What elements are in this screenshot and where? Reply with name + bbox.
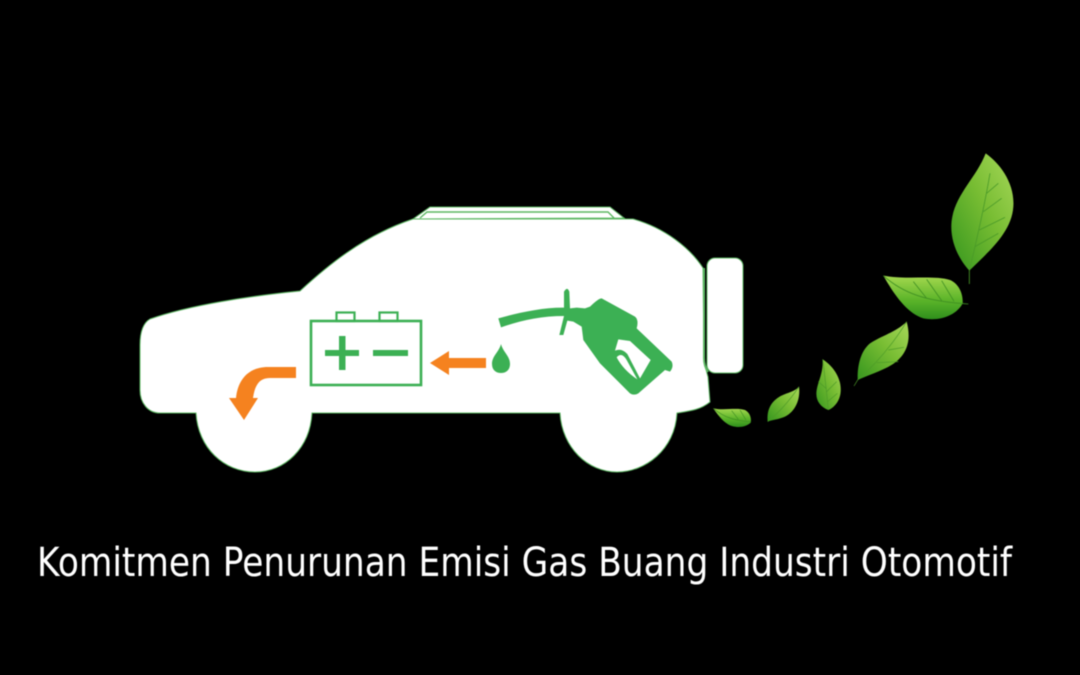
leaf: fifth xyxy=(768,387,799,422)
arrow: battery to wheel xyxy=(229,367,296,420)
minus sign xyxy=(373,350,408,356)
roof rack xyxy=(413,207,624,219)
spare wheel xyxy=(707,258,743,373)
leaf: sixth xyxy=(713,408,751,427)
nozzle handle opening xyxy=(615,339,651,378)
car silhouette xyxy=(140,207,743,472)
icon: battery xyxy=(311,312,421,385)
car body xyxy=(140,219,710,472)
leaves trail xyxy=(713,153,1013,427)
icon: fuel nozzle xyxy=(498,289,673,395)
leaf: fourth xyxy=(816,359,841,410)
leaf: third xyxy=(854,322,909,386)
plus sign xyxy=(325,336,359,370)
arrow: fuel to battery xyxy=(430,351,486,375)
leaf: second xyxy=(883,276,968,319)
rear divider line xyxy=(704,268,708,372)
leaf: large top xyxy=(951,153,1013,284)
icon: fuel drop xyxy=(492,344,510,373)
